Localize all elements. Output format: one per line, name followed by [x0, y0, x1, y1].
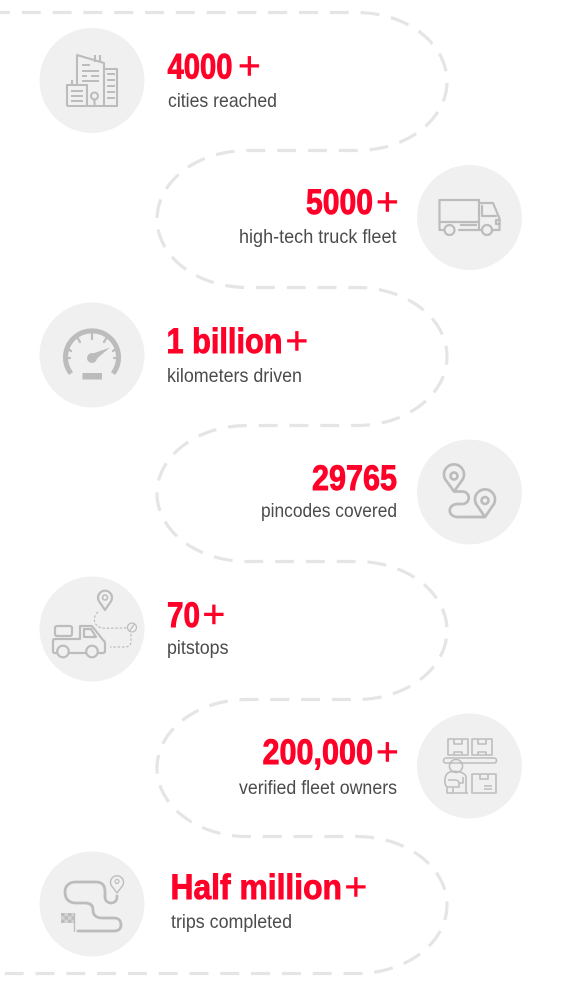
- label: trips completed: trips completed: [171, 911, 292, 933]
- value: 1 billion+: 1 billion: [166, 322, 282, 361]
- value: 70+: +: [202, 594, 225, 636]
- icon: winding track with flag and pin: [40, 852, 144, 956]
- stat: pitstops: [40, 576, 229, 682]
- value: Half million+: Half million: [170, 868, 342, 907]
- label: pitstops: pitstops: [167, 637, 229, 659]
- label: high-tech truck fleet: high-tech truck fleet: [239, 226, 397, 248]
- dashed winding route: [0, 12, 447, 974]
- value: 200,000+: 200,000: [262, 733, 373, 772]
- stat: pincodes covered: [261, 440, 522, 544]
- label: pincodes covered: pincodes covered: [261, 500, 397, 522]
- stat: trips completed: [40, 852, 367, 956]
- value: 70+: [167, 594, 225, 636]
- icon: person with boxes: [417, 714, 522, 818]
- stat: high-tech truck fleet: [239, 165, 522, 270]
- icon: pickup truck with route: [40, 576, 144, 682]
- stat: cities reached: [40, 28, 277, 133]
- value: 70+: 70: [167, 596, 200, 635]
- value: 4000+: +: [238, 45, 261, 88]
- icon: truck: [417, 165, 522, 270]
- stat: kilometers driven: [40, 302, 308, 408]
- value: 5000+: +: [376, 181, 399, 224]
- stat: verified fleet owners: [239, 714, 522, 818]
- label: kilometers driven: kilometers driven: [167, 365, 302, 387]
- icon: city buildings: [40, 28, 144, 133]
- value: 1 billion+: +: [286, 320, 308, 363]
- label: verified fleet owners: verified fleet owners: [239, 777, 397, 799]
- value: 29765: 29765: [312, 459, 397, 498]
- icon: speedometer: [40, 302, 144, 408]
- label: cities reached: cities reached: [168, 90, 277, 112]
- value: Half million+: +: [344, 866, 367, 909]
- value: 4000+: 4000: [168, 48, 232, 86]
- value: 200,000+: +: [376, 731, 399, 774]
- icon: route between two pins: [417, 440, 522, 544]
- value: 5000+: 5000: [306, 183, 373, 222]
